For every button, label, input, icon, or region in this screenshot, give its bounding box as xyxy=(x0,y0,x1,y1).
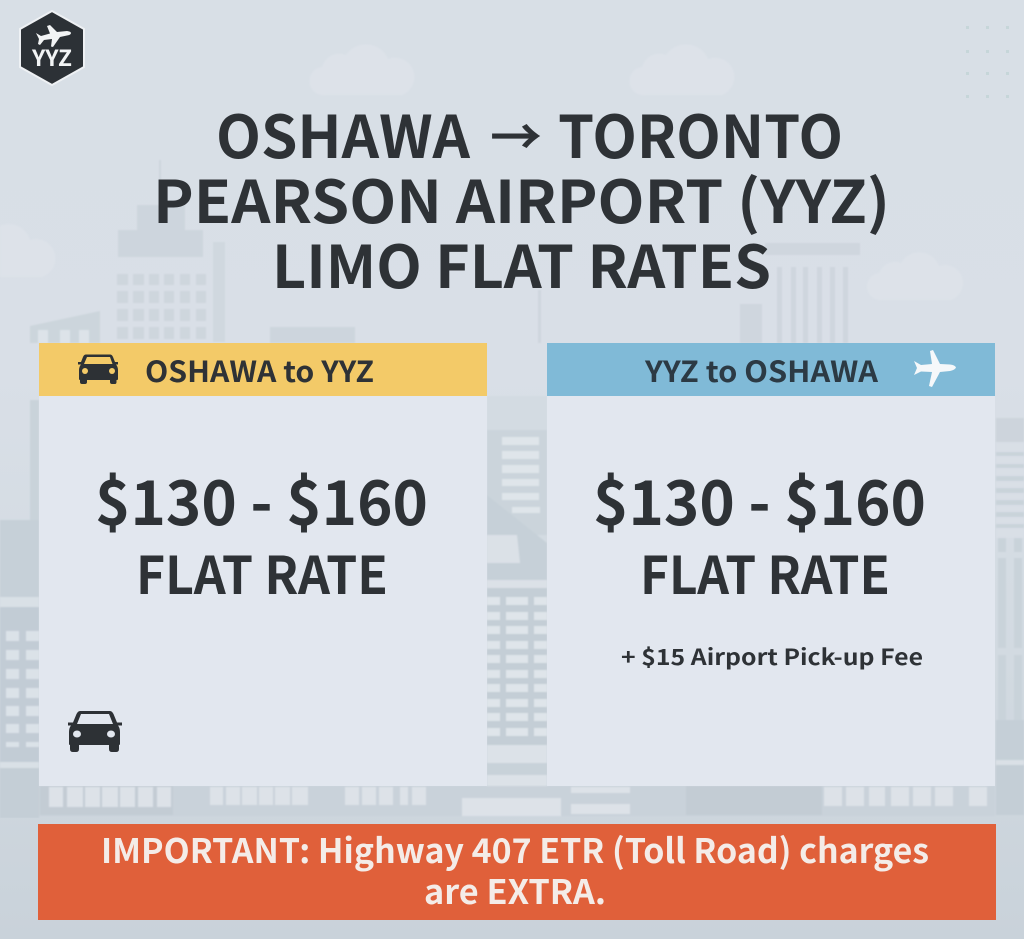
price: $130 - $160 xyxy=(95,453,428,543)
header label: OSHAWA to YYZ xyxy=(145,349,374,391)
centre gap building xyxy=(487,396,547,786)
panel: Oshawa to YYZ xyxy=(39,343,487,786)
left tower xyxy=(118,160,355,343)
title: LIMO FLAT RATES xyxy=(272,220,771,305)
logo text: YYZ xyxy=(31,41,72,73)
logo badge: YYZ xyxy=(20,11,84,85)
price: $130 - $160 xyxy=(593,453,926,543)
icon: plane in logo xyxy=(36,25,71,47)
airport fee note: + $15 Airport Pick-up Fee xyxy=(621,640,923,672)
title: TORONTO xyxy=(558,90,843,175)
panel header: Oshawa to YYZ xyxy=(39,343,487,396)
banner: toll road notice xyxy=(38,824,996,920)
title: → xyxy=(490,98,542,170)
flat rate label: FLAT RATE xyxy=(136,534,388,609)
banner: toll road notice: are EXTRA. xyxy=(424,865,606,914)
flat rate label: FLAT RATE xyxy=(640,534,890,609)
bottom strip xyxy=(39,786,995,816)
decorative dot grid xyxy=(966,26,1009,98)
icon: plane xyxy=(914,350,956,387)
right edge building xyxy=(996,418,1024,442)
title: OSHAWA xyxy=(216,90,471,175)
banner: toll road notice: IMPORTANT: Highway 407 ETR (Toll Road) charges xyxy=(101,824,929,873)
icon: car xyxy=(68,711,122,752)
panel header: YYZ to Oshawa xyxy=(547,343,995,396)
header label: YYZ to OSHAWA xyxy=(644,349,878,391)
right tower xyxy=(538,243,860,343)
icon: car in header xyxy=(78,354,118,384)
title: PEARSON AIRPORT (YYZ) xyxy=(153,155,890,240)
left edge building xyxy=(30,400,39,520)
panel: YYZ to Oshawa xyxy=(547,343,995,786)
title xyxy=(153,90,890,305)
clouds xyxy=(0,44,963,300)
